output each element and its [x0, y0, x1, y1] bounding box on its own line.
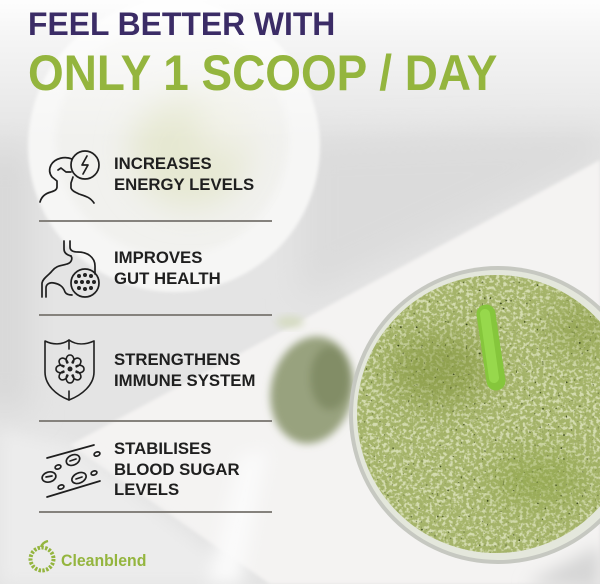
- straw: [485, 314, 496, 381]
- label: stabilises blood sugar levels: STABILISES: [114, 439, 211, 458]
- logo wordmark: Cleanblend: [61, 552, 146, 570]
- label: improves gut health: GUT HEALTH: [114, 268, 221, 288]
- label: improves gut health: IMPROVES: [114, 248, 202, 267]
- glass: [349, 266, 600, 564]
- board: [70, 160, 600, 584]
- icon: shield with virus: [44, 339, 95, 401]
- logo: Cleanblend: [28, 540, 146, 572]
- label: increases energy levels: INCREASES: [114, 154, 212, 173]
- label: stabilises blood sugar levels: [114, 439, 240, 499]
- title line 2: ONLY 1 SCOOP / DAY: [28, 45, 497, 101]
- label: strengthens immune system: IMMUNE SYSTEM: [114, 370, 255, 390]
- icon: head with energy bolt: [39, 150, 100, 204]
- powder scoop: [261, 329, 363, 451]
- label: stabilises blood sugar levels: LEVELS: [114, 480, 179, 499]
- label: strengthens immune system: STRENGTHENS: [114, 350, 241, 369]
- label: increases energy levels: [114, 154, 254, 194]
- icon: blood vessel with cells: [41, 444, 101, 498]
- icon: stomach with gut flora: [41, 240, 100, 298]
- icon: dotted green apple: [28, 540, 56, 572]
- bowl: [28, 0, 320, 292]
- title line 1: FEEL BETTER WITH: [28, 6, 335, 42]
- label: stabilises blood sugar levels: BLOOD SUGAR: [114, 460, 240, 478]
- label: increases energy levels: ENERGY LEVELS: [114, 174, 254, 194]
- label: improves gut health: [114, 248, 221, 288]
- label: strengthens immune system: [114, 350, 255, 390]
- top fade behind heading: [0, 0, 600, 140]
